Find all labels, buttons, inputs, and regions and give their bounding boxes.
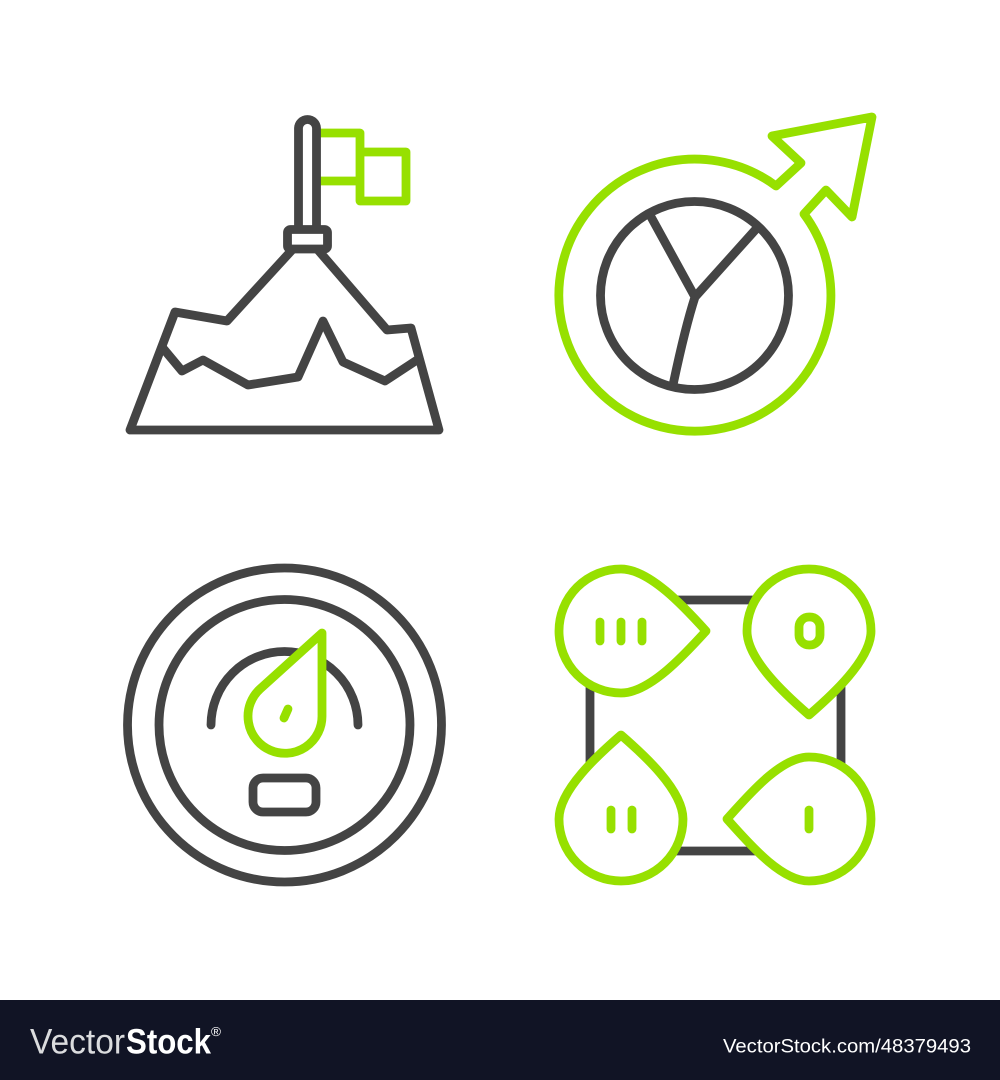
logo: VectorStock: Vector — [30, 1022, 125, 1062]
male symbol ring and arrow — [559, 117, 872, 431]
pie chart — [600, 202, 788, 390]
flag pole — [298, 120, 316, 229]
flag — [320, 133, 406, 201]
outer ring — [128, 568, 442, 882]
image id: VectorStock.com/48379493 — [723, 1036, 971, 1058]
icon: mountain with flag — [130, 120, 439, 430]
gauge scale arc — [211, 652, 358, 725]
logo: VectorStock: Stock — [126, 1022, 211, 1062]
logo: VectorStock: ® — [211, 1024, 221, 1039]
pin 0 — [747, 569, 871, 715]
mountain outline — [130, 250, 439, 430]
logo: VectorStock — [30, 1022, 221, 1062]
pin II — [559, 735, 683, 881]
icon: gauge — [128, 568, 442, 882]
icon: square with four numbered pins — [559, 569, 871, 881]
snow line — [162, 321, 417, 385]
footer bar — [0, 1000, 1000, 1080]
icon: male symbol with pie chart — [559, 117, 872, 431]
readout box — [253, 778, 316, 812]
pole base — [288, 230, 328, 249]
pin III — [559, 569, 706, 693]
square — [590, 600, 841, 851]
inner ring — [159, 600, 410, 850]
pin I — [727, 757, 871, 881]
needle mark — [284, 709, 288, 718]
green needle drop — [248, 633, 322, 753]
